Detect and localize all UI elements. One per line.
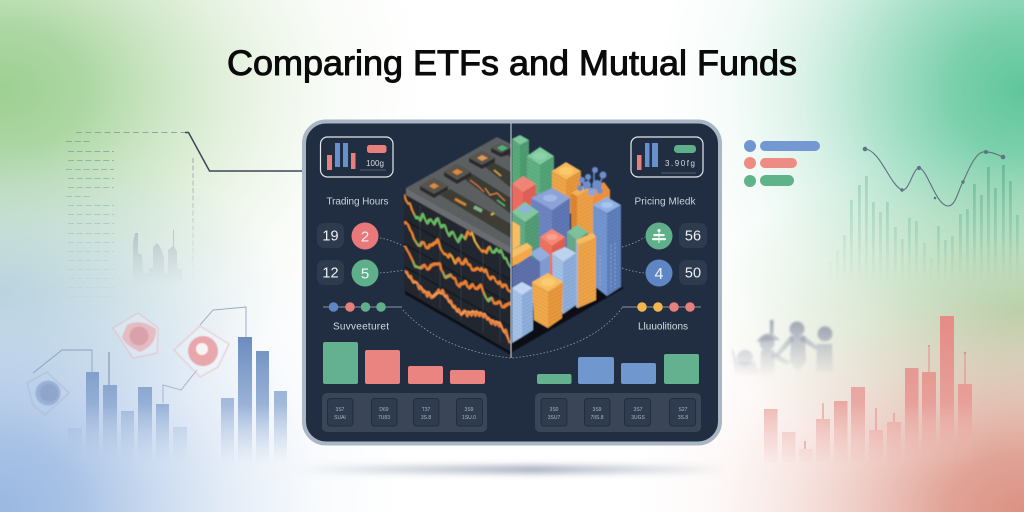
building: periwinkle large (531, 188, 570, 265)
left metric tray (322, 393, 487, 432)
panel ground shadow (295, 466, 729, 473)
left badge: mini bar chart: 100g (366, 159, 384, 168)
left stat row one: 2 (361, 228, 369, 246)
legend (744, 140, 820, 187)
left stat row one: 19 (322, 228, 339, 244)
right metric tray: 3SU7 (548, 415, 560, 421)
right stat row two (646, 260, 707, 286)
right stat row one (646, 222, 707, 250)
title: Comparing ETFs and Mutual Funds (227, 44, 797, 83)
right metric tray: S27 (679, 407, 688, 413)
label: pricing model: Pricing Mledk (634, 196, 696, 208)
right badge: mini bar chart (631, 137, 703, 177)
building: light blue (552, 247, 576, 314)
right stat row two: 4 (655, 266, 664, 283)
left metric tray: 3S.8 (421, 415, 431, 421)
left stat row two: 5 (361, 266, 369, 282)
left metric tray: 7U83 (378, 415, 390, 421)
top chips (420, 143, 511, 198)
left blue bar chart (68, 337, 287, 462)
left metric tray: 1SU.0 (462, 415, 476, 421)
left metric tray: 3S7 (336, 407, 345, 413)
connector line from left chart to panel (76, 132, 302, 285)
left metric tray: D69 (379, 407, 389, 413)
right faded green thin bars (829, 165, 1019, 288)
building: orange with blue cluster (571, 167, 610, 305)
main dashboard panel (304, 122, 720, 444)
left bars (323, 342, 485, 384)
building: back green (512, 135, 529, 200)
label: left section: Suvveeturet (333, 322, 389, 332)
dotted connectors to the center graphic (380, 237, 645, 358)
building: periwinkle mid (512, 247, 550, 302)
network node: red polygon two (174, 326, 229, 377)
building: orange narrow front (576, 233, 596, 308)
left stat row two: 12 (322, 266, 339, 282)
building: red mid (540, 229, 565, 278)
left badge: mini bar chart (320, 137, 393, 177)
right metric tray: 3S0 (550, 407, 559, 413)
center split line (510, 123, 512, 358)
right metric tray (535, 393, 701, 432)
building: orange left block (512, 221, 532, 267)
left metric tray: SUAI (334, 415, 346, 421)
faded skyline silhouette (133, 230, 182, 284)
right bars (537, 354, 699, 384)
top troughs (440, 147, 511, 238)
building: green (527, 147, 554, 197)
cube top face (406, 137, 511, 247)
cube left face (404, 190, 511, 352)
faded people silhouettes (732, 320, 833, 378)
right metric tray: 3S9 (593, 407, 602, 413)
panel frame (304, 122, 720, 444)
right timeline dots (622, 302, 701, 312)
right badge: mini bar chart: 3.90fg (665, 159, 695, 168)
building: green left with cap (512, 202, 539, 270)
right curve line chart (863, 147, 1005, 206)
left stat row one (317, 222, 378, 250)
base shadow (512, 276, 624, 352)
left stat row two (317, 260, 378, 286)
bar chart connector lines (33, 307, 246, 403)
building: light blue front (512, 282, 533, 343)
left decorative dashed table lines (66, 142, 114, 324)
left metric tray: T37 (422, 407, 431, 413)
center: ETF trading cube (404, 137, 512, 355)
network node: red polygon one (113, 313, 158, 358)
building: orange back (552, 162, 581, 215)
building: tall blue right (593, 197, 621, 296)
left timeline dots (323, 302, 402, 312)
right metric tray: 3UGS (631, 415, 645, 421)
label: right section: Lluuolitions (638, 322, 688, 332)
building: orange front (532, 273, 563, 328)
right metric tray: 3S7 (634, 407, 643, 413)
center: mutual fund city blocks (512, 135, 624, 352)
right stat row one: 56 (685, 228, 701, 244)
right metric tray: 7IIS.8 (590, 415, 604, 421)
candlestick chart rows on left face (404, 194, 512, 350)
left metric tray: 3S9 (465, 407, 474, 413)
right metric tray: 3S.8 (678, 415, 688, 421)
building: red (512, 176, 536, 245)
network node: blue polygon (27, 372, 69, 415)
building: small green with block (567, 225, 588, 262)
right red bar chart (764, 316, 972, 462)
right stat row two: 50 (685, 266, 701, 282)
label: trading hours: Trading Hours (326, 196, 388, 208)
